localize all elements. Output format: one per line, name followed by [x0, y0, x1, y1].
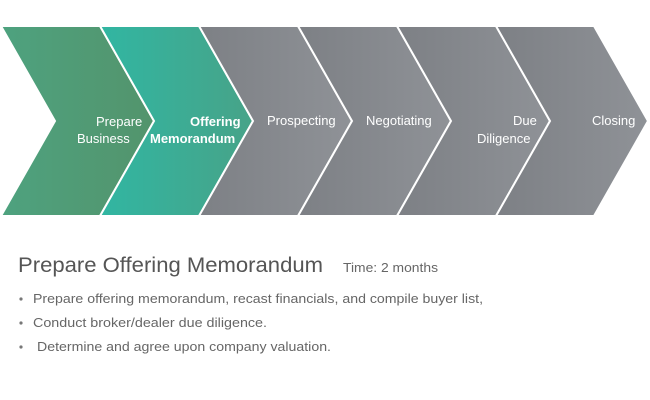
- chevron: Offering Memorandum: Offering: [190, 114, 241, 129]
- chevron: Prepare Business: Business: [77, 131, 130, 146]
- chevron: Prepare Business: Prepare: [96, 114, 142, 129]
- bullet list: Prepare offering memorandum, recast financials, and compile buyer list,: [33, 291, 483, 306]
- bullet list: Determine and agree upon company valuation.: [37, 339, 331, 354]
- chevron: Negotiating: [298, 26, 451, 216]
- chevron: Due Diligence: Diligence: [477, 131, 530, 146]
- chevron: Prospecting: [199, 26, 352, 216]
- heading: [18, 254, 439, 277]
- chevron: Negotiating: Negotiating: [366, 113, 432, 128]
- chevron: Closing: [496, 26, 648, 216]
- chevron: Due Diligence: [397, 26, 550, 216]
- heading: Time: 2 months: [343, 260, 439, 275]
- chevron: Closing: Closing: [592, 113, 635, 128]
- chevron: Offering Memorandum: Memorandum: [150, 131, 235, 146]
- chevron: Prepare Business: [1, 26, 154, 216]
- chevron: Due Diligence: Due: [513, 113, 537, 128]
- chevron: Offering Memorandum: [100, 26, 253, 216]
- chevron: Prospecting: Prospecting: [267, 113, 336, 128]
- bullet list: Conduct broker/dealer due diligence.: [33, 315, 267, 330]
- bullet list: [19, 291, 483, 354]
- heading: Prepare Offering Memorandum: [18, 254, 323, 277]
